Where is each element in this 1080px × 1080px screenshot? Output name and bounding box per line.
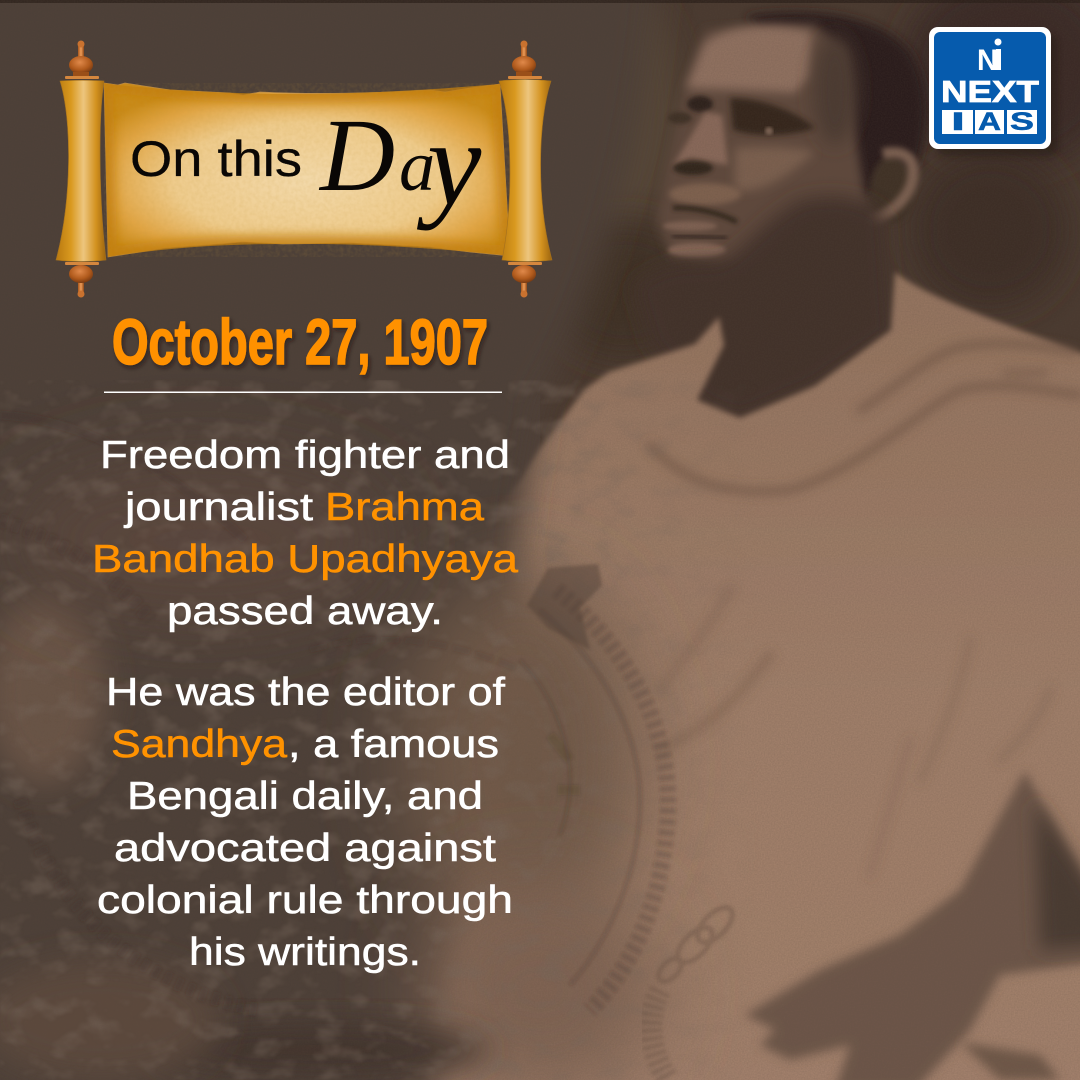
scroll paper <box>104 83 510 257</box>
paragraph: editor of Sandhya: , a famous <box>288 723 499 766</box>
paragraph: editor of Sandhya: Sandhya <box>111 723 287 766</box>
day script text: y <box>416 96 482 231</box>
watch light tones <box>0 460 660 1080</box>
face <box>657 24 866 269</box>
lips <box>663 208 737 257</box>
logo: Next IAS: I <box>951 108 965 136</box>
logo: Next IAS <box>929 27 1058 156</box>
logo: Next IAS: A <box>978 108 1001 136</box>
paragraph: freedom fighter <box>92 434 518 633</box>
hand <box>745 771 1080 1080</box>
chain <box>651 902 738 1080</box>
paragraph: freedom fighter: journalist <box>124 486 313 529</box>
watch texture <box>0 380 639 1080</box>
lower fold <box>960 1042 1060 1080</box>
logo: Next IAS: S <box>1010 108 1034 136</box>
divider line <box>104 392 502 393</box>
day script text: Da <box>320 98 435 213</box>
on this text: On this <box>130 131 302 187</box>
right roller <box>499 80 552 262</box>
paragraph: freedom fighter: Bandhab Upadhyaya <box>92 538 518 581</box>
beard and neck <box>632 196 893 420</box>
hair <box>745 12 926 200</box>
paragraph: editor of Sandhya: his writings. <box>189 931 421 974</box>
paragraph: editor of Sandhya <box>97 671 513 974</box>
paragraph: editor of Sandhya: He was the editor of <box>106 671 505 714</box>
paper edge burn <box>104 83 510 257</box>
top edge shade <box>0 0 1080 3</box>
paragraph: freedom fighter: Brahma <box>325 486 484 529</box>
ear <box>868 153 914 224</box>
left fade overlay <box>0 0 660 1080</box>
temple shade <box>813 35 857 145</box>
robe folds <box>650 344 1080 875</box>
robe <box>400 272 1080 1080</box>
watch crown <box>527 564 602 650</box>
scroll banner <box>56 40 552 298</box>
paragraph: editor of Sandhya: advocated against <box>114 827 496 870</box>
facial features <box>668 96 815 205</box>
scroll finials <box>65 40 542 298</box>
portrait photograph <box>400 0 1080 1080</box>
left roller <box>56 80 106 262</box>
forehead highlight <box>686 26 812 93</box>
photo backdrop <box>540 0 1080 600</box>
paragraph: editor of Sandhya: Bengali daily, and <box>127 775 483 818</box>
logo: Next IAS: N <box>977 44 998 77</box>
paper texture <box>104 83 510 257</box>
watch rings <box>0 415 668 1010</box>
paragraph: freedom fighter: passed away. <box>167 590 443 633</box>
logo: Next IAS: NEXT <box>941 74 1039 109</box>
paragraph: freedom fighter: Freedom fighter and <box>100 434 510 477</box>
date heading: October 27, 1907 <box>112 306 488 378</box>
pocket watch background <box>0 380 760 1080</box>
paragraph: editor of Sandhya: colonial rule through <box>97 879 513 922</box>
hand shadow <box>1035 800 1080 950</box>
